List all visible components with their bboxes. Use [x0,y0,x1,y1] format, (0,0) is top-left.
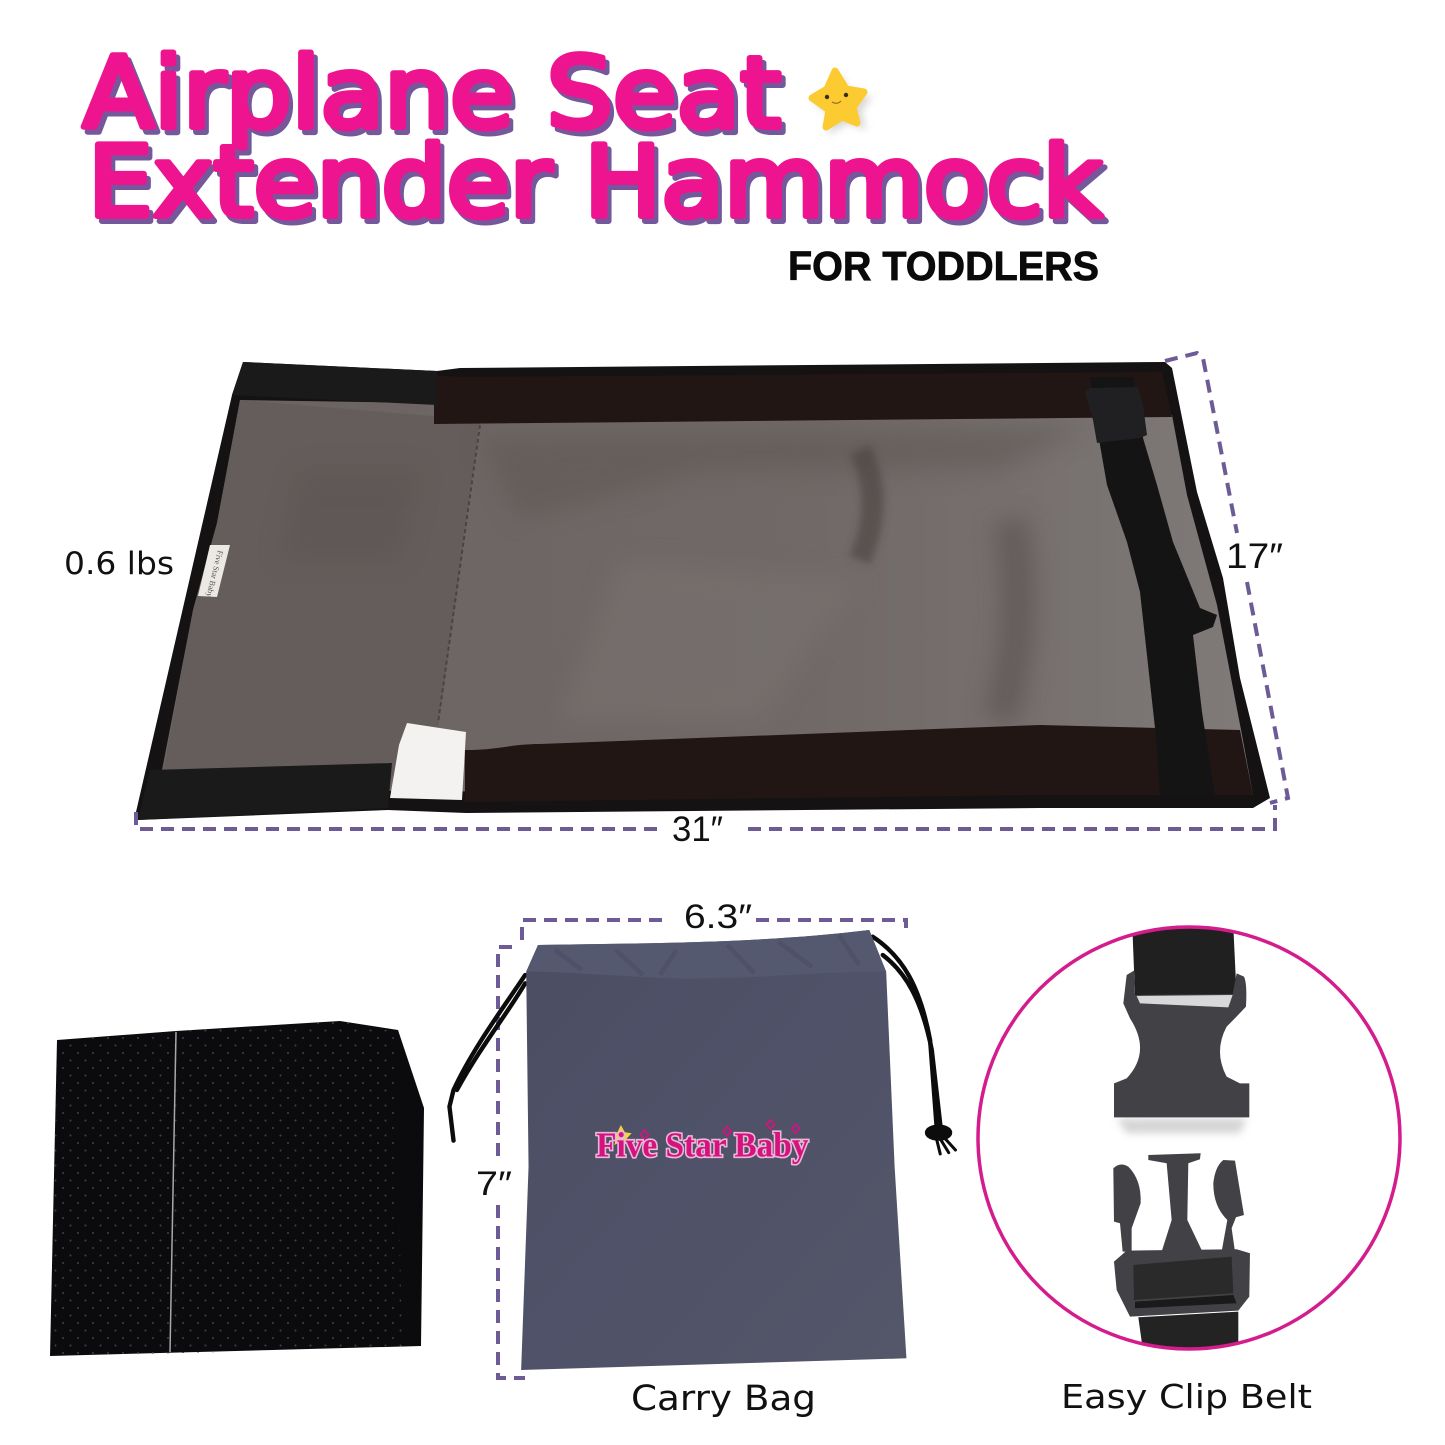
hammock black border [136,362,1270,820]
bottom strap [1138,1312,1238,1348]
plastic buckle [1085,387,1147,443]
dimension: 7 inch: 7″ [476,1165,512,1203]
buckle circle callout [978,927,1400,1353]
belt through slot [1133,1257,1233,1300]
bottom left strap [138,763,392,820]
fleece shading [160,400,1090,790]
subtitle: FOR TODDLERS [788,243,1099,289]
carry bag [449,930,955,1370]
buckle male half [1113,1153,1250,1317]
drawstring cords [449,937,955,1154]
top left strap [232,362,437,405]
brand logo: Five Star Baby [596,1125,809,1165]
stitched seam [438,425,480,723]
gathered bag top [526,930,886,979]
bag body [521,930,906,1370]
sewn brand tag [198,545,230,598]
white label patch [390,723,466,800]
black belt strap [1085,377,1217,795]
title [83,37,1106,245]
dimension: 31 inch [136,805,1275,849]
dimension: 6.3 inch: 6.3″ [684,898,752,936]
dimension: 7 inch [476,947,525,1378]
title line 1: Airplane Seat [83,37,781,151]
buckle shadow [1117,1118,1247,1133]
title line 2: Extender Hammock [92,131,1106,245]
top strap [1132,927,1237,997]
dimension: 31 inch: 31″ [672,810,723,849]
dimension: 17 inch [1165,353,1288,803]
icon: smiling star [812,71,872,135]
easy clip belt label: Easy Clip Belt [1061,1377,1312,1416]
carry bag label: Carry Bag [631,1379,816,1419]
hammock fleece surface [160,400,1253,795]
hammock product photo [136,362,1270,820]
top dark band [434,372,1172,424]
bottom dark band [465,725,1253,802]
title line 1: Airplane Seat [87,42,785,156]
dimension: 6.3 inch [522,898,906,940]
sewn brand tag: Five Star Baby [204,550,225,598]
buckle female half [1114,971,1249,1117]
weight label: 0.6 lbs [64,546,174,582]
folded black mesh fabric [50,1021,424,1356]
dimension: 17 inch: 17″ [1226,537,1283,576]
title line 2: Extender Hammock [88,126,1102,240]
